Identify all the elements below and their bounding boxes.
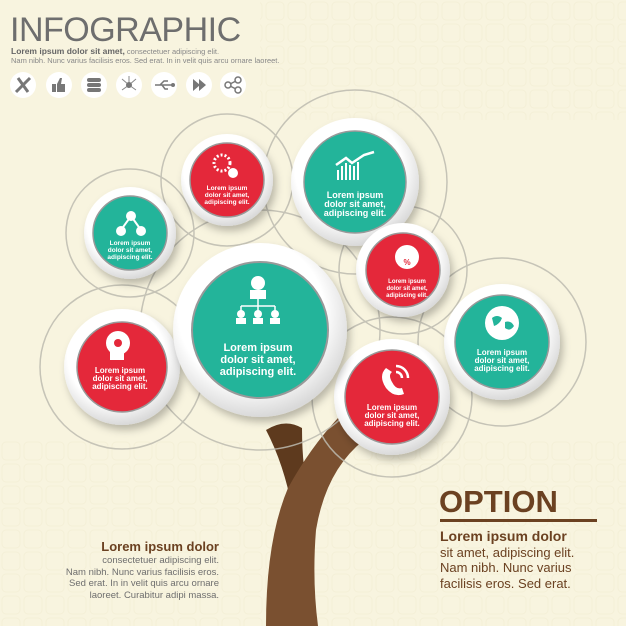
node: main hierarchy: dolor sit amet,	[220, 354, 296, 366]
node: main hierarchy	[173, 243, 347, 417]
bottom-left text	[66, 539, 219, 600]
bottom-left text: Lorem ipsum dolor	[101, 539, 219, 554]
option text: facilisis eros. Sed erat.	[440, 576, 571, 590]
node: pie: Lorem ipsum	[388, 279, 426, 285]
option text: sit amet, adipiscing elit.	[440, 544, 574, 560]
node: main hierarchy: adipiscing elit.	[220, 366, 296, 378]
option text: Lorem ipsum dolor	[440, 528, 567, 544]
node: top chart: adipiscing elit.	[324, 208, 386, 218]
header icons	[10, 72, 246, 98]
node: phone: Lorem ipsum	[367, 403, 417, 412]
node: 123: dolor sit amet,	[108, 247, 152, 254]
node: pie: adipiscing elit.	[386, 293, 428, 299]
node: pie: %	[403, 258, 411, 267]
node: bulb head: Lorem ipsum	[95, 366, 145, 375]
node: gears: Lorem ipsum	[207, 185, 248, 192]
node: phone	[334, 339, 450, 455]
node: main hierarchy: Lorem ipsum	[223, 342, 293, 354]
node: 123: adipiscing elit.	[107, 254, 153, 261]
bottom-left text: Nam nibh. Nunc varius facilisis eros.	[66, 566, 219, 578]
node: globe	[444, 284, 560, 400]
node: pie: dolor sit amet,	[386, 286, 428, 292]
option text: Nam nibh. Nunc varius	[440, 560, 572, 575]
outer glass rings	[40, 90, 586, 477]
bottom-left text: laoreet. Curabitur adipi massa.	[90, 590, 219, 600]
bottom-left text: Sed erat. In in velit quis arcu ornare	[69, 578, 219, 589]
node: 123	[84, 187, 176, 279]
option heading: OPTION	[439, 484, 558, 519]
node: gears: adipiscing elit.	[204, 199, 250, 206]
bottom-left text: consectetuer adipiscing elit.	[102, 555, 219, 566]
node: gears: dolor sit amet,	[205, 192, 249, 199]
option underline	[440, 519, 597, 522]
node: bulb head: adipiscing elit.	[92, 382, 148, 391]
node: globe: adipiscing elit.	[474, 364, 530, 373]
tree trunk	[266, 418, 364, 626]
node: gears	[181, 134, 273, 226]
subtitle text: Nam nibh. Nunc varius facilisis eros. Sed erat. In in velit quis arcu ornare laoreet.	[11, 56, 279, 65]
node: bulb head: dolor sit amet,	[93, 374, 147, 383]
node: pie	[356, 223, 450, 317]
node: phone: adipiscing elit.	[364, 419, 420, 428]
subtitle text: Lorem ipsum dolor sit amet, consectetuer adipiscing elit.	[11, 46, 219, 56]
node: bulb head	[64, 309, 180, 425]
node: top chart: Lorem ipsum	[327, 190, 383, 200]
node: phone: dolor sit amet,	[365, 411, 419, 420]
node: top chart: dolor sit amet,	[324, 199, 386, 209]
node: top chart	[291, 118, 419, 246]
node: 123: Lorem ipsum	[110, 240, 151, 247]
node: globe: dolor sit amet,	[475, 356, 529, 365]
subtitle text	[11, 46, 279, 65]
title: INFOGRAPHIC	[10, 11, 241, 49]
option text	[440, 528, 574, 590]
node: globe: Lorem ipsum	[477, 348, 527, 357]
